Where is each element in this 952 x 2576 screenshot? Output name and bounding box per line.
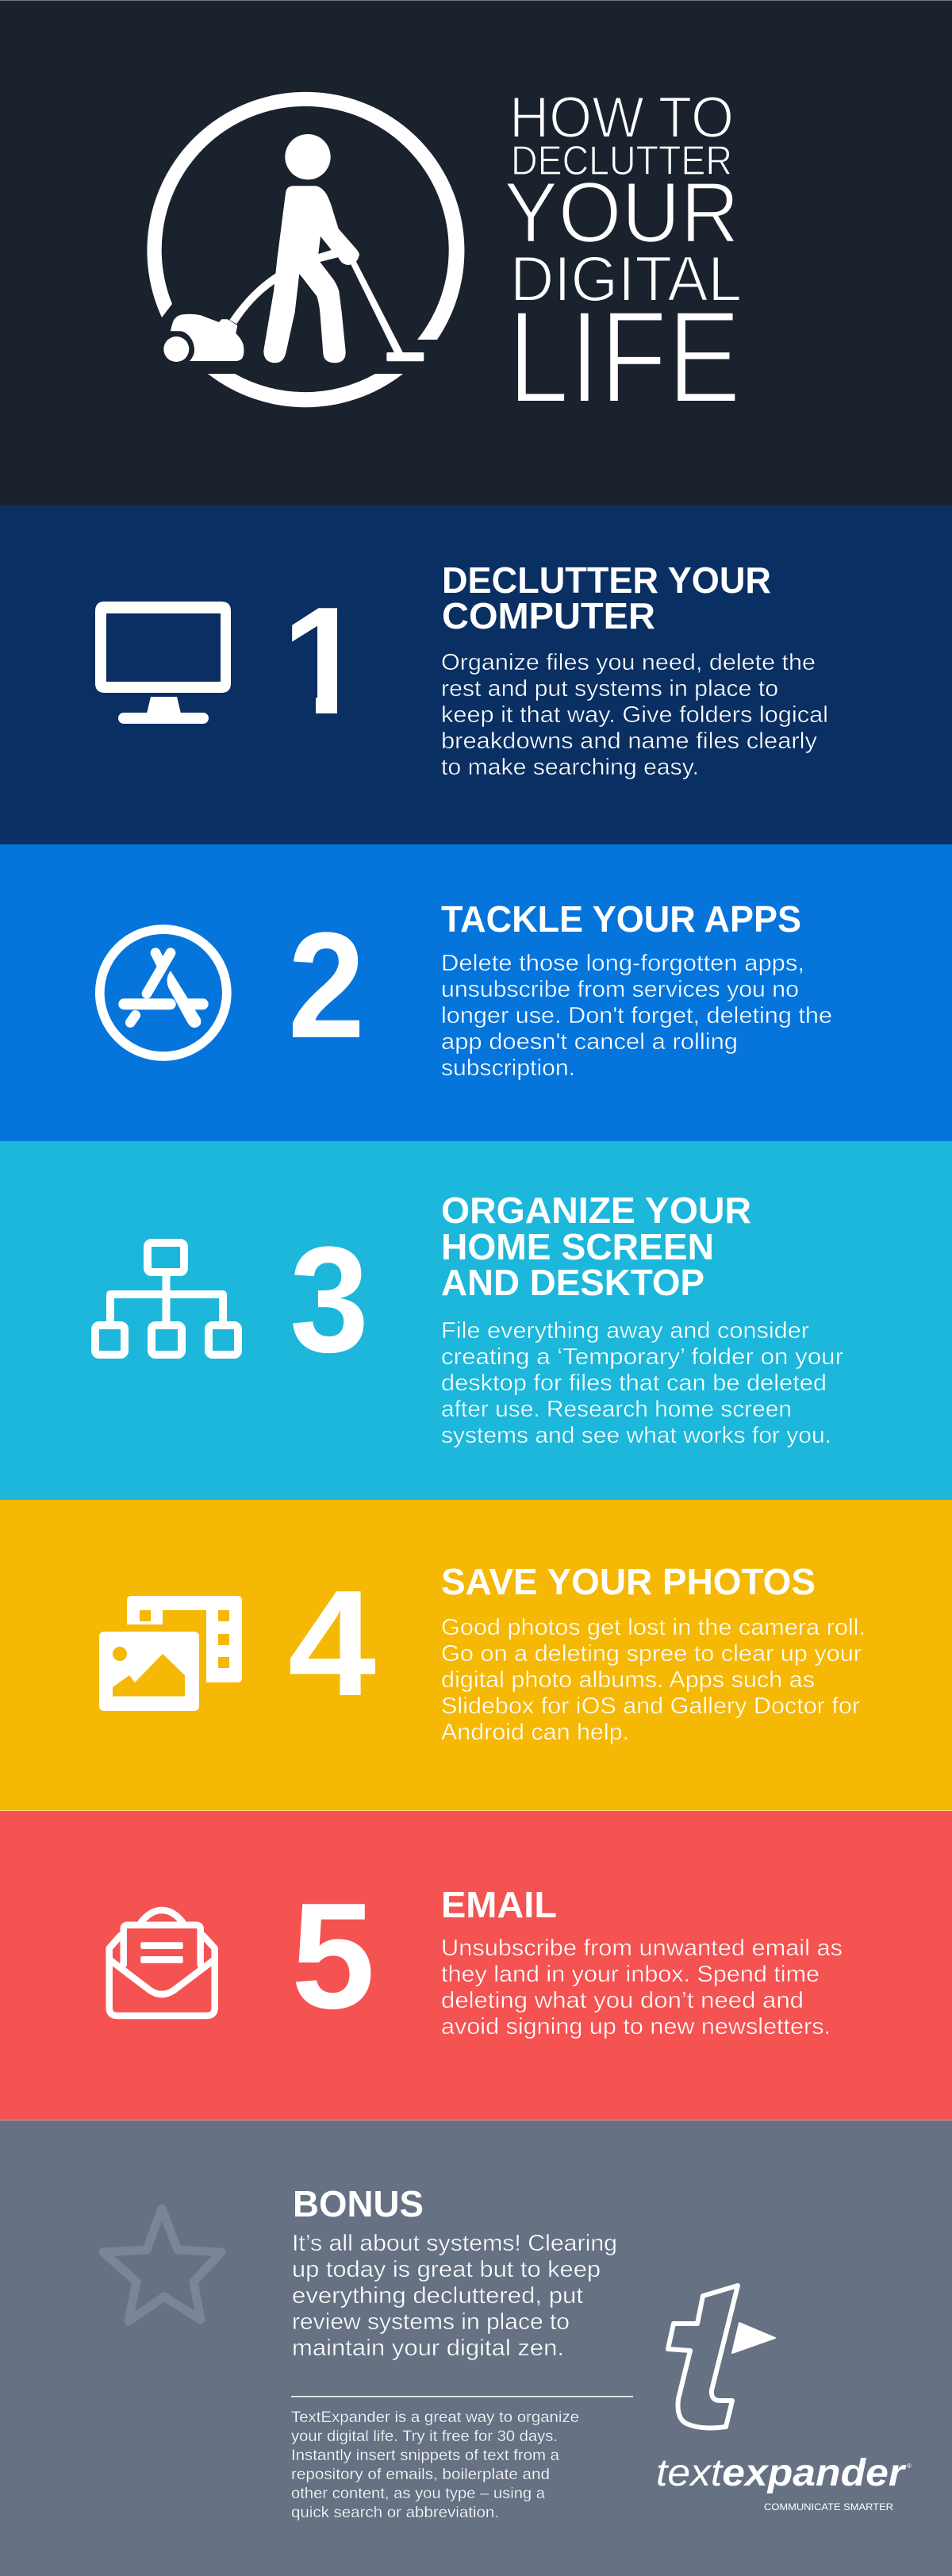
promo text: repository of emails, boilerplate and (291, 2466, 550, 2483)
number 5: 5 (291, 1872, 375, 2040)
title: LIFE (508, 284, 741, 431)
icon: open envelope (109, 1910, 215, 2016)
logo: textexpander: textexpander (656, 2452, 906, 2494)
heading: HOME SCREEN (441, 1226, 714, 1267)
body text (441, 1615, 866, 1745)
body text: desktop for files that can be deleted (441, 1371, 827, 1396)
body text: It’s all about systems! Clearing (292, 2231, 617, 2256)
body text (292, 2231, 617, 2361)
icon: app store (100, 929, 227, 1056)
panel: step 4 save your photos (0, 1500, 952, 1810)
body text: maintain your digital zen. (292, 2336, 564, 2361)
heading: EMAIL (441, 1884, 557, 1925)
body text: keep it that way. Give folders logical (441, 702, 828, 728)
body text: Android can help. (441, 1720, 629, 1745)
heading: BONUS (293, 2183, 424, 2224)
title: DIGITAL (510, 244, 742, 315)
promo text: quick search or abbreviation. (291, 2505, 499, 2521)
body text: avoid signing up to new newsletters. (441, 2014, 831, 2040)
logo: textexpander: ® (907, 2463, 912, 2470)
panel: step 1 declutter your computer (0, 506, 952, 844)
number 1: 1 (282, 575, 367, 746)
body text: Slidebox for iOS and Gallery Doctor for (441, 1694, 860, 1719)
body text: deleting what you don’t need and (441, 1988, 804, 2013)
body text: subscription. (441, 1055, 575, 1081)
heading: COMPUTER (442, 595, 655, 636)
body text: app doesn't cancel a rolling (441, 1029, 738, 1055)
heading: TACKLE YOUR APPS (441, 898, 801, 940)
body text: breakdowns and name files clearly (441, 729, 818, 754)
body text: to make searching easy. (441, 755, 699, 780)
heading: AND DESKTOP (441, 1262, 704, 1303)
panel: step 3 organize your home screen and desktop (0, 1141, 952, 1500)
body text (441, 650, 828, 780)
heading (442, 559, 771, 636)
body text: digital photo albums. Apps such as (441, 1667, 815, 1693)
title: HOW TO (509, 86, 734, 150)
body text: up today is great but to keep (292, 2257, 601, 2282)
body text: Go on a deleting spree to clear up your (441, 1641, 862, 1667)
number 3: 3 (290, 1216, 369, 1384)
promo text: your digital life. Try it free for 30 days. (291, 2428, 558, 2445)
body text: Organize files you need, delete the (441, 650, 816, 675)
body text: after use. Research home screen (441, 1397, 792, 1422)
body text: rest and put systems in place to (441, 676, 778, 702)
heading: ORGANIZE YOUR (441, 1190, 751, 1231)
icon: monitor (95, 602, 231, 724)
title: DECLUTTER (511, 138, 732, 184)
body text (441, 1318, 843, 1448)
promo text: other content, as you type – using a (291, 2486, 545, 2502)
body text (441, 951, 832, 1081)
icon: hierarchy (95, 1243, 238, 1355)
heading (441, 1190, 751, 1303)
body text: File everything away and consider (441, 1318, 809, 1344)
body text: Unsubscribe from unwanted email as (441, 1936, 843, 1961)
panel: bonus (0, 2120, 952, 2576)
body text: unsubscribe from services you no (441, 977, 799, 1002)
number 2: 2 (288, 902, 365, 1070)
promo text: TextExpander is a great way to organize (291, 2409, 579, 2426)
promo text: Instantly insert snippets of text from a (291, 2447, 559, 2464)
panel: step 2 tackle your apps (0, 844, 952, 1141)
body text: creating a ‘Temporary’ folder on your (441, 1344, 843, 1370)
number 4: 4 (288, 1559, 376, 1728)
promo text (291, 2409, 579, 2521)
body text: Good photos get lost in the camera roll. (441, 1615, 866, 1640)
logo: textexpander: COMMUNICATE SMARTER (764, 2501, 893, 2513)
icon: person vacuuming in circle (147, 92, 464, 407)
panel: header (0, 0, 952, 506)
icon: photo and film strip (99, 1596, 242, 1711)
body text (441, 1936, 843, 2040)
logo: textexpander (656, 2286, 912, 2513)
panel: step 5 email (0, 1810, 952, 2120)
title (504, 86, 742, 431)
body text: review systems in place to (292, 2309, 570, 2335)
heading: DECLUTTER YOUR (442, 559, 771, 601)
body text: everything decluttered, put (292, 2283, 583, 2309)
body text: systems and see what works for you. (441, 1423, 831, 1448)
body text: Delete those long-forgotten apps, (441, 951, 804, 976)
title: YOUR (504, 164, 739, 261)
heading: SAVE YOUR PHOTOS (441, 1561, 816, 1602)
body text: longer use. Don't forget, deleting the (441, 1003, 832, 1028)
body text: they land in your inbox. Spend time (441, 1962, 820, 1987)
icon: star (103, 2209, 221, 2321)
